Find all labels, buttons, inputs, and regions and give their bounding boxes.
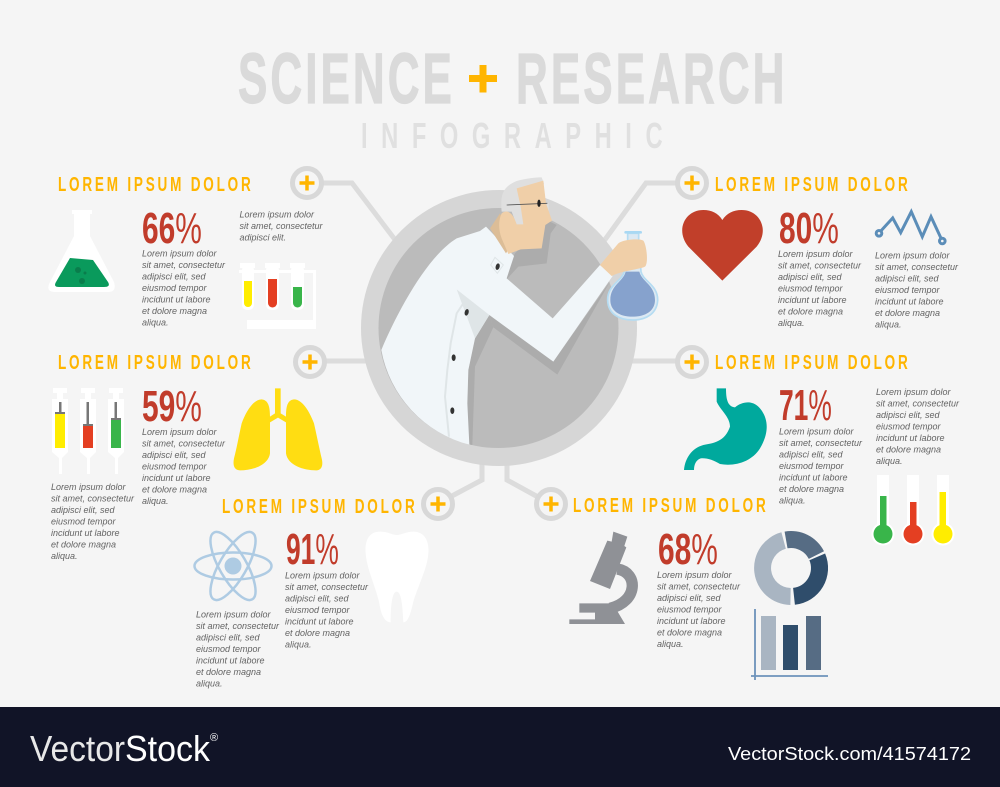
title: SCIENCE: [238, 39, 452, 119]
neck: [490, 213, 513, 253]
text block: adipisci elit, sed: [875, 274, 940, 284]
text block: et dolore magna: [875, 308, 940, 318]
percentage: 66%: [142, 203, 202, 252]
inner disc: [378, 208, 618, 448]
text block: sit amet, consectetur: [196, 621, 280, 631]
panel: flask 66%: [48, 168, 324, 329]
text block: incidunt ut labore: [876, 433, 945, 443]
text block: sit amet, consectetur: [142, 438, 226, 448]
icon: tooth: [366, 532, 428, 622]
text block: sit amet, consectetur: [240, 221, 324, 231]
text block: adipisci elit, sed: [196, 632, 261, 642]
text block: eiusmod tempor: [285, 605, 351, 615]
icon: heart: [682, 210, 763, 281]
percentage: 71%: [779, 380, 832, 430]
plus badge: [424, 490, 452, 518]
text block: eiusmod tempor: [779, 461, 845, 471]
text block: sit amet, consectetur: [285, 582, 369, 592]
donut chart: [754, 531, 828, 605]
text block: Lorem ipsum dolor: [875, 250, 951, 260]
text block: adipisci elit, sed: [142, 272, 207, 282]
central scientist illustration: [361, 177, 658, 466]
text block: adipisci elit, sed: [142, 450, 207, 460]
text block: incidunt ut labore: [285, 616, 354, 626]
text block: Lorem ipsum dolor: [778, 249, 854, 259]
title: RESEARCH: [516, 39, 784, 119]
text block: eiusmod tempor: [142, 462, 208, 472]
percentage: 80%: [779, 203, 839, 252]
text block: et dolore magna: [657, 628, 722, 638]
text block: adipisci elit.: [240, 232, 286, 242]
text block: aliqua.: [778, 318, 805, 328]
text block: adipisci elit, sed: [876, 410, 941, 420]
text block: aliqua.: [285, 640, 312, 650]
text block: et dolore magna: [196, 667, 261, 677]
text block: aliqua.: [142, 496, 169, 506]
percentage: 91%: [286, 524, 339, 574]
text block: eiusmod tempor: [196, 644, 262, 654]
text block: eiusmod tempor: [142, 283, 208, 293]
text block: aliqua.: [657, 639, 684, 649]
heading: LOREM IPSUM DOLOR: [58, 350, 251, 374]
text block: Lorem ipsum dolor: [779, 426, 855, 436]
heading: LOREM IPSUM DOLOR: [715, 172, 908, 196]
text block: sit amet, consectetur: [142, 260, 226, 270]
text block: eiusmod tempor: [657, 604, 723, 614]
subtitle: INFOGRAPHIC: [361, 115, 663, 156]
plus badge: [292, 168, 322, 198]
text block: et dolore magna: [876, 444, 941, 454]
panel: stomach 71%: [678, 348, 960, 546]
text block: eiusmod tempor: [51, 516, 117, 526]
text block: eiusmod tempor: [876, 422, 942, 432]
text block: sit amet, consectetur: [51, 494, 135, 504]
text block: incidunt ut labore: [142, 294, 211, 304]
icon: atom: [194, 526, 272, 606]
text block: eiusmod tempor: [875, 285, 941, 295]
text block: adipisci elit, sed: [285, 594, 350, 604]
text block: et dolore magna: [778, 306, 843, 316]
text block: incidunt ut labore: [875, 296, 944, 306]
text block: Lorem ipsum dolor: [196, 610, 272, 620]
heading: LOREM IPSUM DOLOR: [58, 172, 251, 196]
hand: [600, 239, 647, 276]
text block: aliqua.: [142, 318, 169, 328]
text block: sit amet, consectetur: [875, 262, 959, 272]
text block: et dolore magna: [142, 484, 207, 494]
icon: syringes: [52, 388, 124, 474]
outer ring: [361, 190, 637, 466]
heading: LOREM IPSUM DOLOR: [715, 350, 908, 374]
text block: sit amet, consectetur: [657, 582, 741, 592]
percentage: 59%: [142, 381, 202, 430]
heading: LOREM IPSUM DOLOR: [573, 493, 766, 517]
footer url: VectorStock.com/41574172: [728, 744, 971, 764]
icon: thermometers: [872, 475, 954, 546]
plus badge: [678, 348, 706, 376]
text block: eiusmod tempor: [778, 284, 844, 294]
text block: aliqua.: [196, 678, 223, 688]
line chart: [876, 212, 945, 244]
text block: adipisci elit, sed: [657, 593, 722, 603]
icon: stomach: [684, 388, 767, 470]
text block: adipisci elit, sed: [51, 505, 116, 515]
heading: LOREM IPSUM DOLOR: [222, 494, 415, 518]
icon: test tubes: [239, 263, 316, 329]
text block: incidunt ut labore: [779, 472, 848, 482]
bar chart: [751, 609, 828, 680]
panel: microscope 68%: [536, 490, 828, 680]
text block: Lorem ipsum dolor: [51, 482, 127, 492]
text block: Lorem ipsum dolor: [240, 210, 315, 220]
text block: Lorem ipsum dolor: [285, 570, 361, 580]
glasses: [507, 203, 547, 205]
text block: incidunt ut labore: [778, 295, 847, 305]
icon: lungs: [234, 388, 322, 470]
text block: Lorem ipsum dolor: [142, 427, 218, 437]
footer logo: Vector: [30, 728, 125, 769]
icon: flask: [48, 210, 115, 292]
text block: et dolore magna: [142, 306, 207, 316]
text block: sit amet, consectetur: [779, 438, 863, 448]
text block: incidunt ut labore: [51, 528, 120, 538]
text block: Lorem ipsum dolor: [142, 248, 218, 258]
text block: incidunt ut labore: [657, 616, 726, 626]
panel: tooth 91%: [194, 490, 452, 688]
text block: incidunt ut labore: [196, 656, 265, 666]
text block: et dolore magna: [51, 540, 116, 550]
text block: aliqua.: [875, 320, 902, 330]
text block: aliqua.: [876, 456, 903, 466]
text block: aliqua.: [779, 496, 806, 506]
icon: microscope: [569, 532, 632, 624]
flask: [608, 233, 658, 320]
text block: et dolore magna: [285, 628, 350, 638]
text block: sit amet, consectetur: [876, 398, 960, 408]
text block: adipisci elit, sed: [778, 272, 843, 282]
text block: Lorem ipsum dolor: [657, 570, 733, 580]
text block: Lorem ipsum dolor: [876, 387, 952, 397]
title: [238, 39, 784, 119]
plus badge: [678, 168, 706, 198]
footer bar: [0, 707, 1000, 787]
percentage: 68%: [658, 524, 718, 573]
panel: heart 80%: [678, 168, 959, 330]
hair: [501, 177, 549, 225]
text block: adipisci elit, sed: [779, 450, 844, 460]
text block: et dolore magna: [779, 484, 844, 494]
text block: aliqua.: [51, 551, 78, 561]
text block: sit amet, consectetur: [778, 260, 862, 270]
panel: lungs 59%: [51, 348, 324, 561]
text block: incidunt ut labore: [142, 473, 211, 483]
face: [499, 181, 552, 254]
registered mark: ®: [210, 732, 218, 744]
footer logo: Stock: [125, 728, 211, 769]
plus badge: [536, 490, 566, 518]
plus badge: [296, 348, 324, 376]
